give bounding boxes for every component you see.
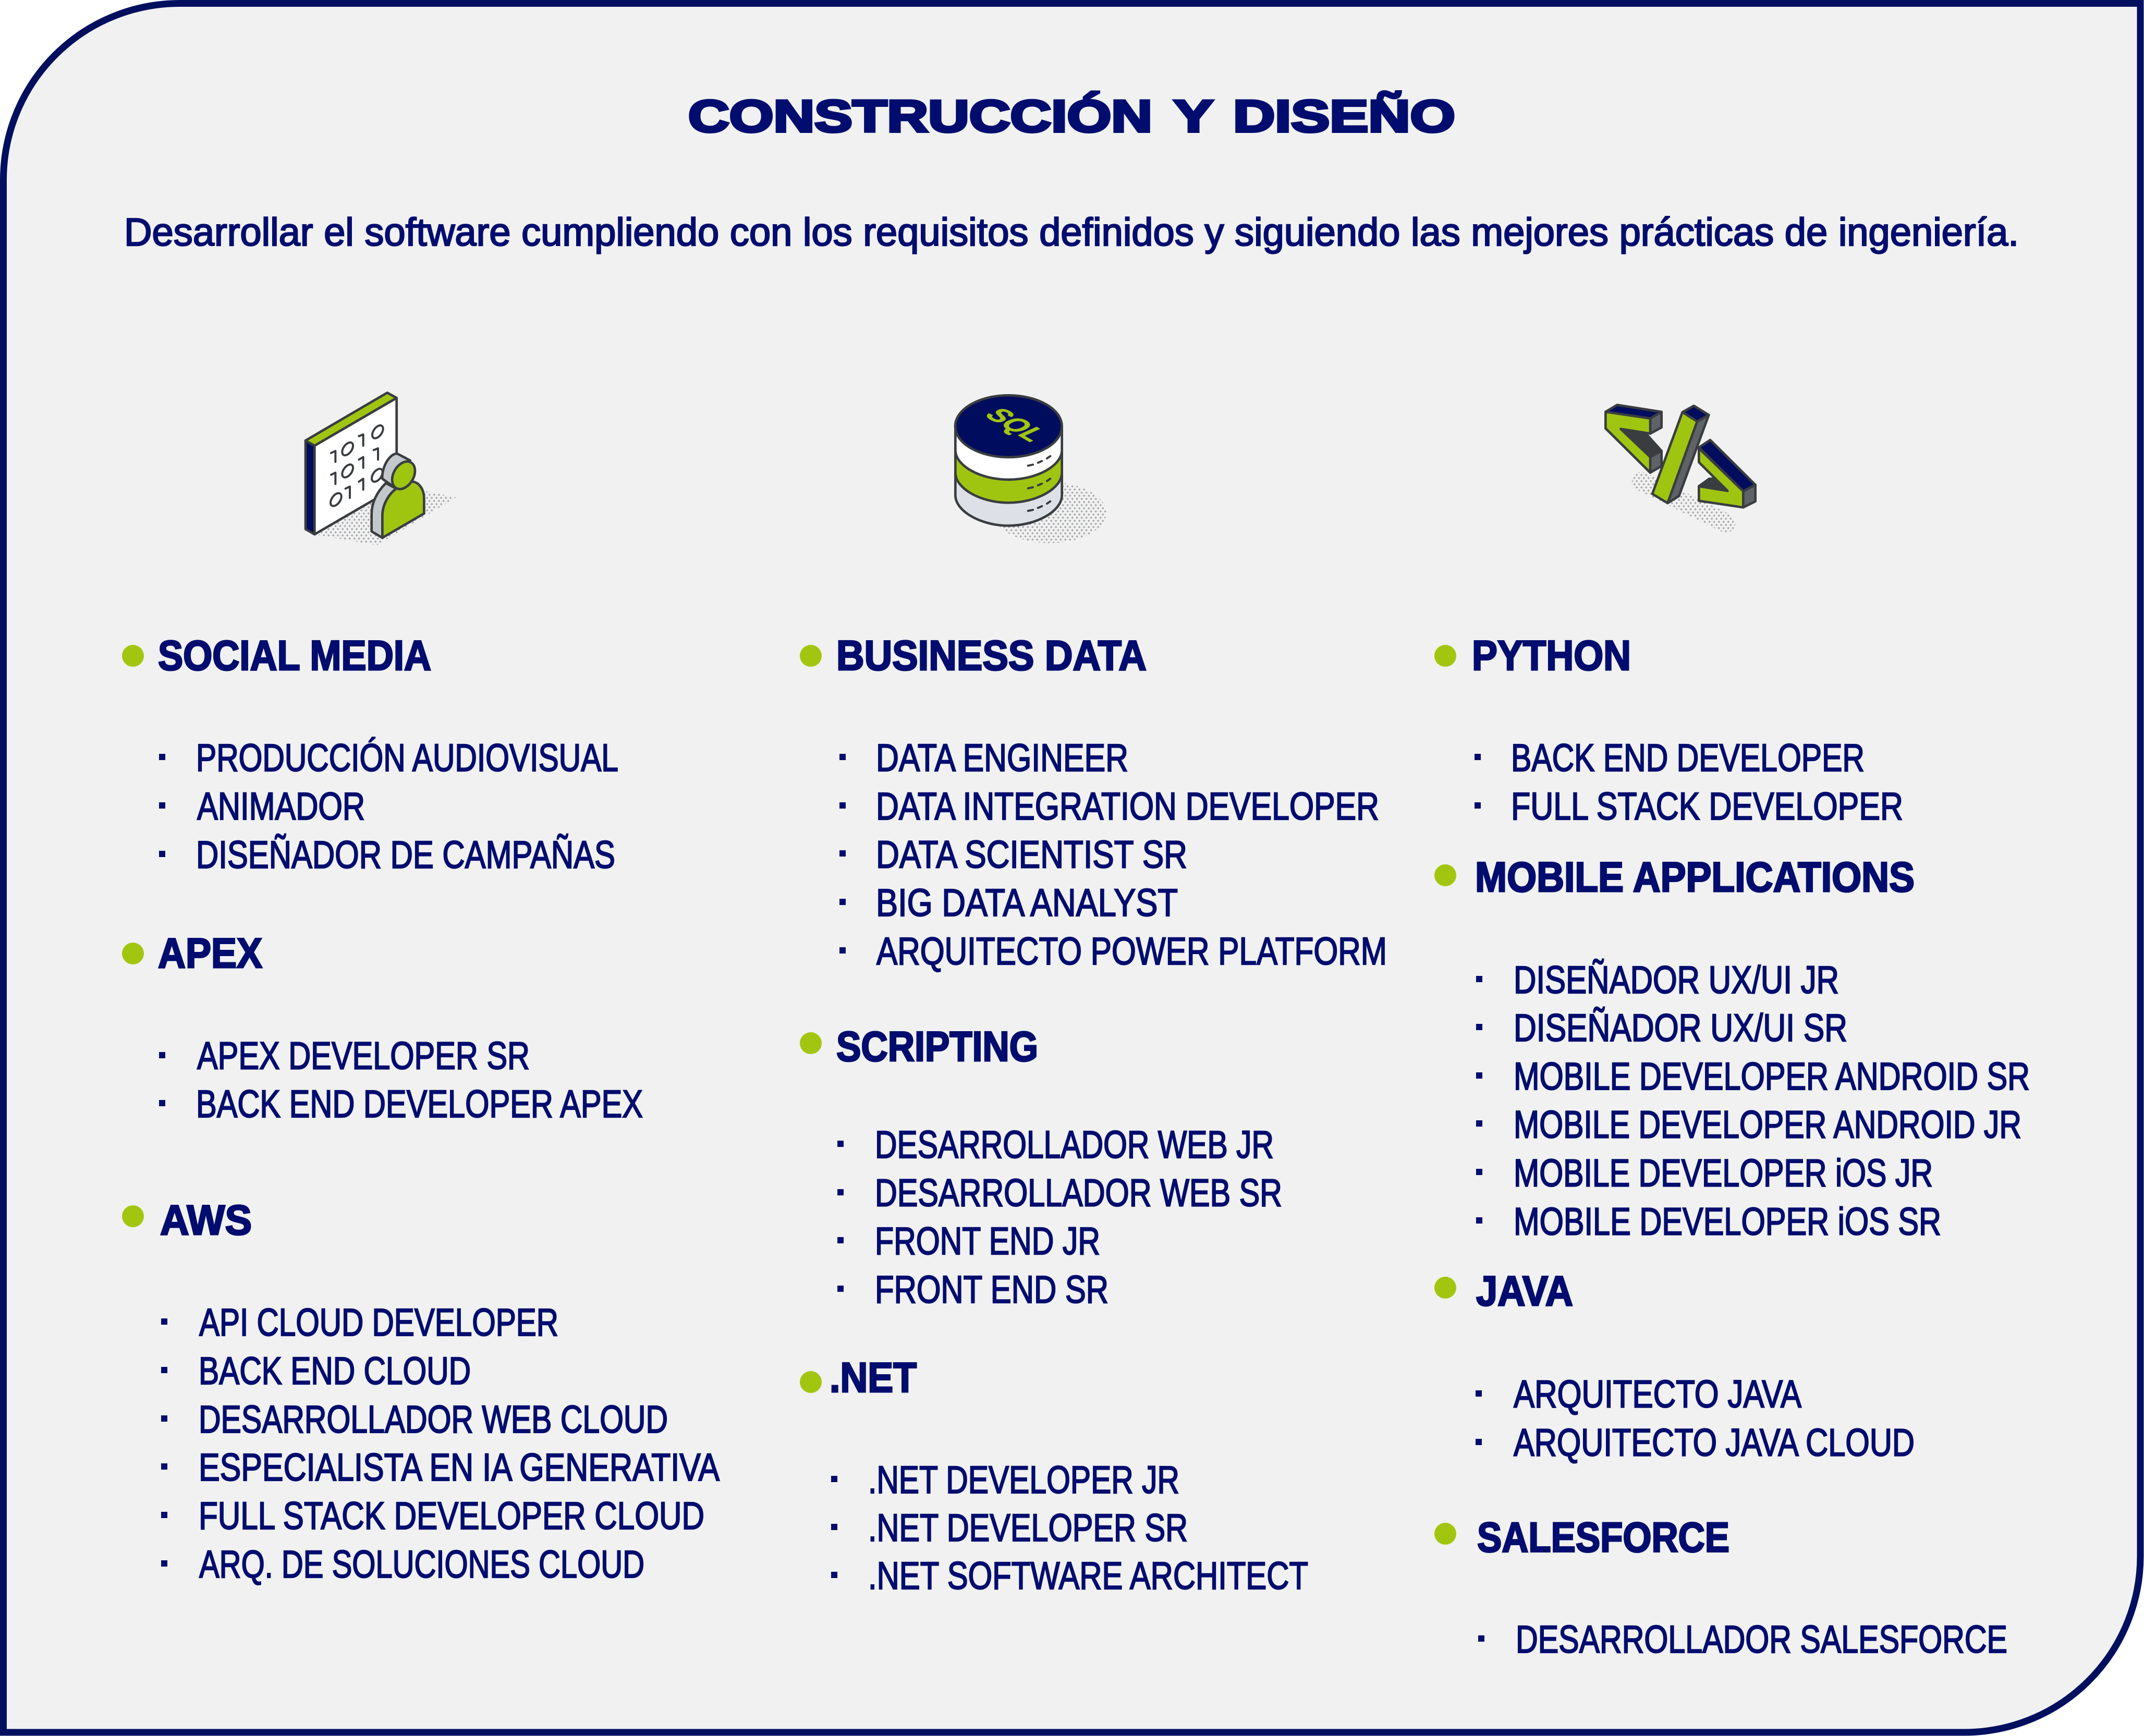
list: DESARROLLADOR WEB CLOUD [199,1398,668,1441]
icon: SQL database cylinder [955,395,1106,543]
list [159,736,618,876]
list: API CLOUD DEVELOPER [199,1301,558,1344]
list [159,1034,643,1126]
list: FULL STACK DEVELOPER [1511,785,1903,828]
heading: MOBILE APPLICATIONS [1475,854,1915,901]
list: ARQUITECTO JAVA CLOUD [1514,1421,1915,1464]
icon: binary board and person [306,393,456,545]
list: FRONT END JR [875,1219,1100,1263]
list: MOBILE DEVELOPER iOS SR [1514,1200,1941,1243]
list: DESARROLLADOR WEB SR [875,1171,1282,1215]
list: APEX DEVELOPER SR [197,1034,530,1077]
bullet dot [122,943,144,964]
list: FULL STACK DEVELOPER CLOUD [199,1494,704,1537]
section: Social Media [122,632,618,876]
title: CONSTRUCCIÓN [688,92,1152,142]
list: MOBILE DEVELOPER ANDROID SR [1514,1055,2030,1098]
section: AWS [122,1197,720,1586]
section: Java [1434,1268,1915,1464]
list: ARQ. DE SOLUCIONES CLOUD [199,1543,644,1586]
section: Mobile Applications [1434,854,2030,1243]
list: MOBILE DEVELOPER ANDROID JR [1514,1103,2021,1146]
list: MOBILE DEVELOPER iOS JR [1514,1151,1933,1195]
section: Apex [122,930,643,1126]
subtitle: Desarrollar el software cumpliendo con los requisitos definidos y siguiendo las mejores prácticas de ingeniería. [124,210,2019,254]
list: BACK END DEVELOPER APEX [196,1082,643,1126]
section: Scripting [800,1023,1282,1311]
heading: AWS [160,1197,252,1244]
list: .NET SOFTWARE ARCHITECT [868,1554,1308,1597]
icon: code brackets [1605,405,1756,523]
list: BACK END DEVELOPER [1511,736,1865,779]
heading: SALESFORCE [1477,1514,1729,1561]
bullet dot [800,1032,822,1054]
section: Business Data [800,632,1387,973]
list: .NET DEVELOPER SR [868,1506,1188,1549]
list: BACK END CLOUD [199,1349,471,1392]
list: PRODUCCIÓN AUDIOVISUAL [196,736,618,779]
section: Salesforce [1434,1514,2007,1661]
bullet dot [1434,1277,1456,1299]
bullet dot [800,645,822,667]
title [688,92,1455,142]
list: .NET DEVELOPER JR [868,1458,1179,1501]
list: DATA INTEGRATION DEVELOPER [876,785,1379,828]
bullet dot [1434,864,1456,886]
list: DESARROLLADOR SALESFORCE [1516,1618,2007,1661]
list: ANIMADOR [197,785,365,828]
list: ARQUITECTO POWER PLATFORM [876,930,1387,973]
bullet dot [122,645,144,667]
title: DISEÑO [1233,92,1455,142]
heading: BUSINESS DATA [836,632,1147,679]
list: DATA ENGINEER [876,736,1128,779]
list: DATA SCIENTIST SR [876,833,1187,876]
heading: .NET [830,1354,917,1401]
title: Y [1174,92,1213,142]
list: DESARROLLADOR WEB JR [875,1123,1274,1166]
list: BIG DATA ANALYST [876,881,1178,924]
bullet dot [122,1205,144,1227]
list: DISEÑADOR UX/UI JR [1514,958,1839,1001]
list: ESPECIALISTA EN IA GENERATIVA [199,1446,720,1489]
list [161,1301,720,1586]
list [839,736,1387,973]
list [1476,958,2030,1243]
list [837,1123,1282,1311]
bullet dot [1434,1523,1456,1545]
section: Python [1434,632,1903,828]
heading: SOCIAL MEDIA [158,632,431,679]
heading: JAVA [1476,1268,1573,1315]
section: .NET [800,1354,1308,1597]
list [831,1458,1308,1597]
icon: SQL database cylinder: SQL [977,405,1054,445]
heading: APEX [158,930,262,977]
heading: SCRIPTING [836,1023,1038,1070]
list: DISEÑADOR DE CAMPAÑAS [196,833,615,876]
bullet dot [800,1371,822,1393]
list [1475,736,1903,828]
heading: PYTHON [1472,632,1631,679]
bullet dot [1434,645,1456,667]
list: FRONT END SR [875,1268,1108,1311]
list: ARQUITECTO JAVA [1514,1372,1802,1416]
list: DISEÑADOR UX/UI SR [1514,1006,1847,1049]
list [1476,1372,1915,1464]
